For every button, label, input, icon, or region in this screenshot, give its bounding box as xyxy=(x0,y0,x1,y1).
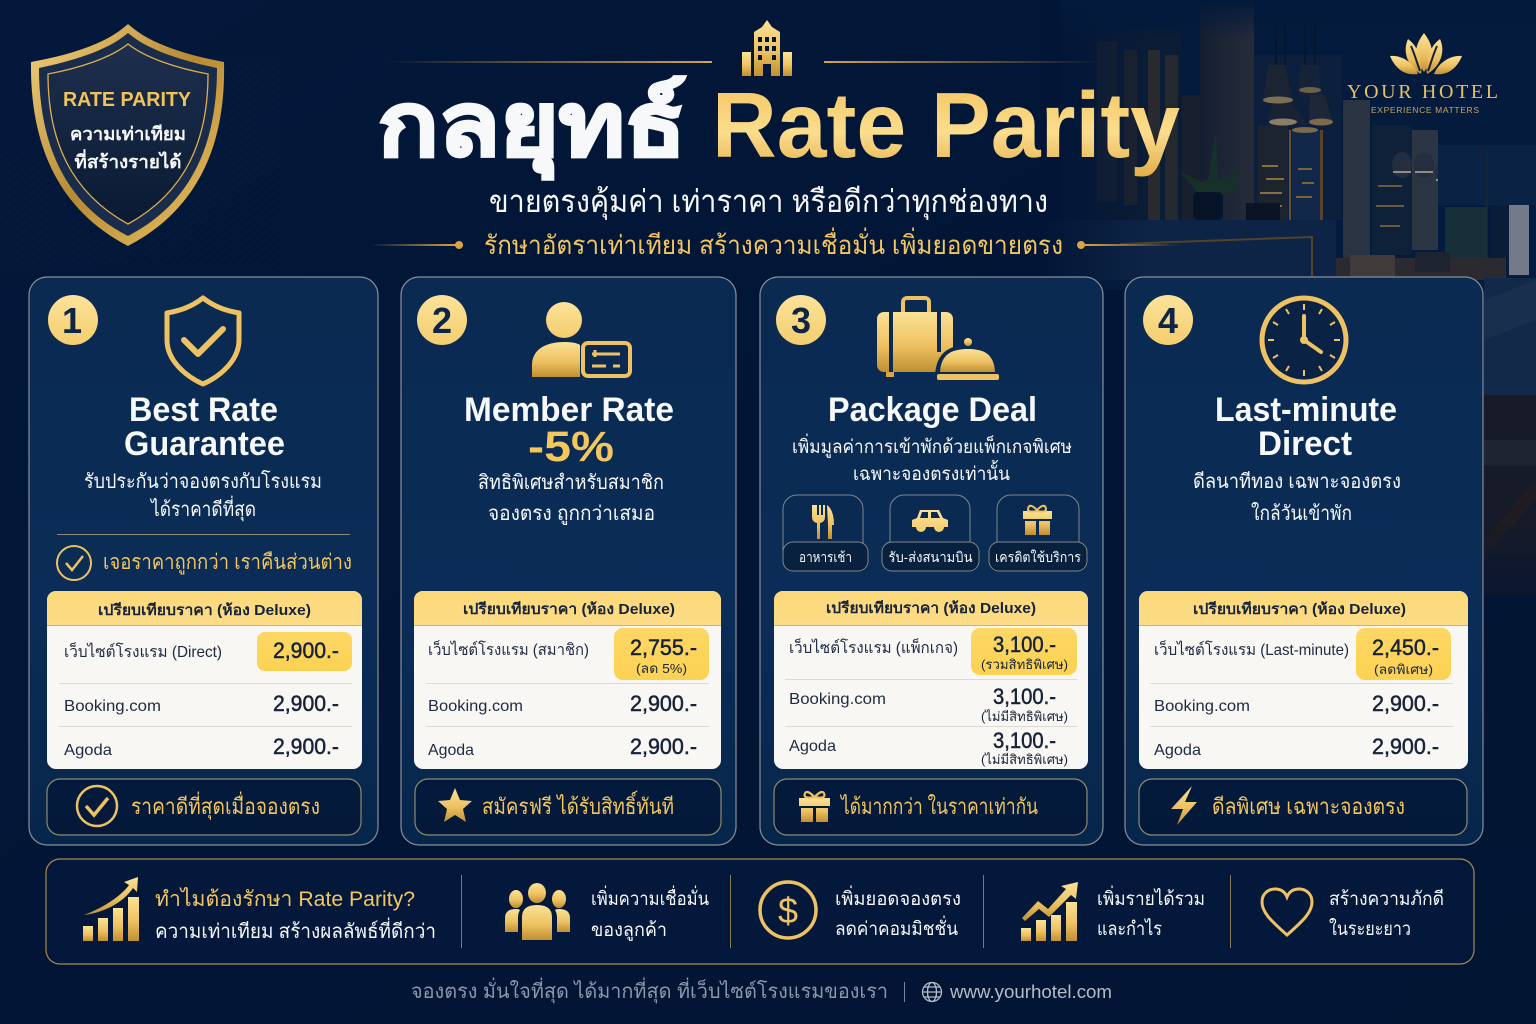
heading: Package Deal xyxy=(828,391,1037,429)
price table: 2,900.- xyxy=(1372,691,1439,716)
benefit: customer trust xyxy=(591,885,709,941)
badge 2 xyxy=(417,295,467,345)
icon: clock xyxy=(1262,298,1346,382)
price table: (ไม่มีสิทธิพิเศษ) xyxy=(981,709,1068,724)
price table: Agoda xyxy=(64,742,112,759)
shield badge xyxy=(31,24,224,246)
heading xyxy=(124,391,285,463)
heading: Guarantee xyxy=(124,425,285,463)
icon: globe xyxy=(922,982,942,1002)
panel: card 3 Package Deal xyxy=(760,277,1103,845)
call to action: ได้มากกว่า ในราคาเท่ากัน xyxy=(839,794,1038,819)
description xyxy=(792,433,1072,485)
price table: 2,900.- xyxy=(273,638,339,663)
refund promise xyxy=(57,546,352,580)
badge 4 xyxy=(1143,295,1193,345)
heading: Last-minute xyxy=(1215,391,1397,429)
price table: (ลดพิเศษ) xyxy=(1374,662,1433,677)
price table: Agoda xyxy=(789,738,836,755)
logo wordmark: YOUR HOTEL xyxy=(1347,81,1498,103)
diagonal texture left xyxy=(0,60,280,270)
tagline with ornaments: รักษาอัตราเท่าเทียม สร้างความเชื่อมั่น เพิ่มยอดขายตรง xyxy=(484,227,1063,260)
badge 2: 2 xyxy=(432,300,452,341)
heading xyxy=(1215,391,1397,463)
description: เฉพาะจองตรงเท่านั้น xyxy=(853,460,1010,485)
price table: 2,900.- xyxy=(630,691,697,716)
price table xyxy=(47,591,362,769)
icon: people xyxy=(505,883,570,940)
price table: Agoda xyxy=(428,742,474,759)
icon: shield check xyxy=(167,298,239,384)
price table: 2,900.- xyxy=(273,691,339,716)
description: สิทธิพิเศษสำหรับสมาชิก xyxy=(478,472,664,494)
price table: เปรียบเทียบราคา (ห้อง Deluxe) xyxy=(1193,601,1406,618)
perk: service credit xyxy=(989,495,1087,571)
description: จองตรง ถูกกว่าเสมอ xyxy=(488,503,655,526)
tagline with ornaments xyxy=(370,227,1180,260)
icon: hotel building xyxy=(742,20,792,76)
price table: เว็บไซต์โรงแรม (Last-minute) xyxy=(1154,639,1349,659)
price table: Booking.com xyxy=(1154,698,1250,715)
price table: 2,450.- xyxy=(1372,635,1439,660)
description: รับประกันว่าจองตรงกับโรงแรม xyxy=(84,470,322,493)
heading: Best Rate xyxy=(129,391,278,429)
price table: Booking.com xyxy=(428,698,523,715)
price table: 3,100.- xyxy=(993,684,1056,709)
icon: suitcase and cloche xyxy=(877,298,999,380)
heading: Direct xyxy=(1258,425,1352,463)
icon: growth chart xyxy=(83,877,139,941)
price table xyxy=(414,591,721,769)
title: Thai: กลยุทธ์ xyxy=(378,75,686,180)
description xyxy=(478,472,664,526)
call to action: ดีลพิเศษ เฉพาะจองตรง xyxy=(1212,794,1405,819)
benefit: revenue: เพิ่มรายได้รวม xyxy=(1097,885,1205,910)
call to action xyxy=(1139,779,1467,835)
description: ได้ราคาดีที่สุด xyxy=(149,495,256,522)
panel: card 4 Last-minute Direct xyxy=(1125,277,1483,845)
price table xyxy=(1139,591,1468,769)
price table: 2,900.- xyxy=(1372,734,1439,759)
benefit: revenue xyxy=(1097,885,1205,940)
perk: breakfast xyxy=(783,495,868,571)
benefit: revenue: และกำไร xyxy=(1097,918,1162,940)
price table: เปรียบเทียบราคา (ห้อง Deluxe) xyxy=(463,601,675,618)
benefit: direct bookings: ลดค่าคอมมิชชั่น xyxy=(835,915,958,940)
logo tagline: EXPERIENCE MATTERS xyxy=(1371,105,1479,115)
badge 1 xyxy=(48,295,98,345)
description: ใกล้วันเข้าพัก xyxy=(1251,502,1352,525)
panel: why keep rate parity xyxy=(46,859,1474,964)
price table: 2,900.- xyxy=(630,734,697,759)
call to action: สมัครฟรี ได้รับสิทธิ์ทันที xyxy=(482,791,674,819)
badge 4: 4 xyxy=(1158,300,1178,341)
price table: 2,755.- xyxy=(630,635,697,660)
price table: 3,100.- xyxy=(993,632,1056,657)
logo: Your Hotel xyxy=(1347,33,1498,115)
price table: (ลด 5%) xyxy=(636,661,687,676)
price table: เปรียบเทียบราคา (ห้อง Deluxe) xyxy=(826,600,1036,617)
call to action xyxy=(47,779,361,835)
price table: (รวมสิทธิพิเศษ) xyxy=(981,657,1068,672)
footer: จองตรง มั่นใจที่สุด ได้มากที่สุด ที่เว็บไซต์โรงแรมของเรา xyxy=(411,977,888,1004)
benefit: direct bookings xyxy=(835,885,961,940)
benefit: loyalty xyxy=(1329,888,1444,940)
benefit: customer trust: ของลูกค้า xyxy=(591,920,667,941)
icon: heart xyxy=(1262,889,1312,935)
benefit: customer trust: เพิ่มความเชื่อมั่น xyxy=(591,885,709,910)
badge 1: 1 xyxy=(62,300,82,341)
shield: Thai line 1: ความเท่าเทียม xyxy=(70,124,186,144)
benefit: loyalty: ในระยะยาว xyxy=(1329,918,1411,940)
icon: dollar coin: $ xyxy=(778,890,798,931)
call to action xyxy=(774,779,1087,835)
icon: dollar coin xyxy=(760,882,816,938)
shield: RATE PARITY: RATE PARITY xyxy=(63,89,192,111)
footer xyxy=(411,977,1112,1004)
price table: 3,100.- xyxy=(993,728,1056,753)
title: Rate Parity: Rate Parity xyxy=(712,73,1180,177)
perk: breakfast: อาหารเช้า xyxy=(799,549,852,565)
description: เพิ่มมูลค่าการเข้าพักด้วยแพ็กเกจพิเศษ xyxy=(792,433,1072,458)
price table: เว็บไซต์โรงแรม (สมาชิก) xyxy=(428,639,589,659)
perk: airport transfer: รับ-ส่งสนามบิน xyxy=(888,549,973,565)
top rule right xyxy=(824,61,1100,63)
icon: member card xyxy=(532,302,630,377)
price table: เปรียบเทียบราคา (ห้อง Deluxe) xyxy=(98,602,311,619)
call to action xyxy=(415,779,721,835)
benefit: direct bookings: เพิ่มยอดจองตรง xyxy=(835,885,961,910)
price table: 2,900.- xyxy=(273,734,339,759)
icon: revenue chart xyxy=(1021,882,1078,941)
background photo: hotel lobby xyxy=(1040,0,1536,860)
badge 3: 3 xyxy=(791,300,811,341)
price table: Agoda xyxy=(1154,742,1201,759)
perk: airport transfer xyxy=(882,495,979,571)
refund promise: เจอราคาถูกกว่า เราคืนส่วนต่าง xyxy=(103,551,352,575)
price table: Booking.com xyxy=(64,698,161,715)
price table: (ไม่มีสิทธิพิเศษ) xyxy=(981,752,1068,767)
benefit: loyalty: สร้างความภักดี xyxy=(1329,888,1444,910)
shield: Thai line 2: ที่สร้างรายได้ xyxy=(74,149,182,172)
description xyxy=(84,470,322,522)
title xyxy=(378,73,1180,180)
call to action: ราคาดีที่สุดเมื่อจองตรง xyxy=(131,791,320,820)
subtitle: ขายตรงคุ้มค่า เท่าราคา หรือดีกว่าทุกช่องทาง xyxy=(489,184,1048,221)
why heading: ทำไมต้องรักษา Rate Parity? xyxy=(155,887,415,911)
description: ดีลนาทีทอง เฉพาะจองตรง xyxy=(1193,471,1401,493)
price table: เว็บไซต์โรงแรม (แพ็กเกจ) xyxy=(789,637,958,657)
icon: lotus xyxy=(1390,33,1462,74)
price table: Booking.com xyxy=(789,691,886,708)
top rule left xyxy=(385,61,712,63)
why subheading: ความเท่าเทียม สร้างผลลัพธ์ที่ดีกว่า xyxy=(155,917,436,943)
price table xyxy=(774,591,1088,769)
website: www.yourhotel.com xyxy=(949,982,1112,1002)
badge 3 xyxy=(776,295,826,345)
perk: service credit: เครดิตใช้บริการ xyxy=(995,549,1081,565)
description xyxy=(1193,471,1401,525)
panel: card 2 Member Rate xyxy=(401,277,736,845)
price table: เว็บไซต์โรงแรม (Direct) xyxy=(64,641,222,661)
discount figure: -5% xyxy=(528,423,614,471)
panel: card 1 Best Rate Guarantee xyxy=(29,277,378,845)
heading: Member Rate xyxy=(464,391,674,429)
